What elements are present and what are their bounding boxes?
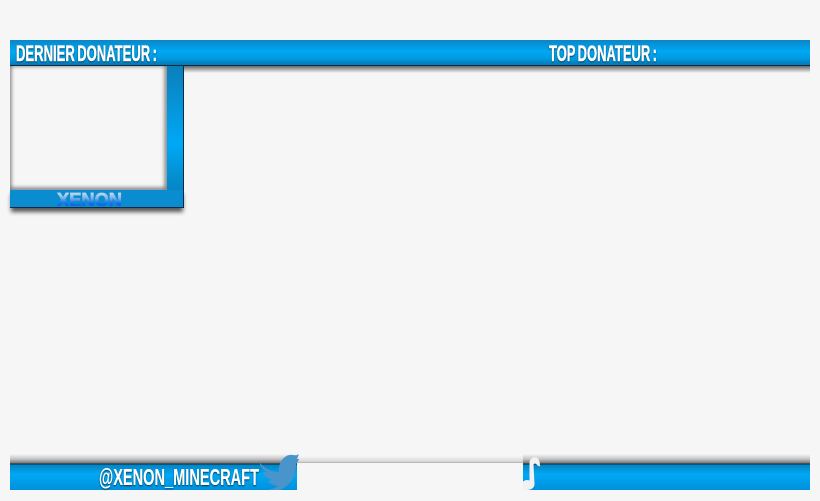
top bar dark edge (10, 65, 810, 66)
twitter handle: @XENON_MINECRAFT (99, 464, 259, 490)
webcam opening with inner shadow (9, 64, 167, 190)
bottom right edge (523, 464, 810, 465)
frame drop shadow (11, 194, 183, 212)
panel: top bar (10, 40, 810, 66)
icon: twitter bird (260, 454, 299, 490)
bottom left shadow (10, 454, 297, 464)
heading: last donor: DERNIER DONATEUR : (16, 41, 157, 66)
bottom left bar (10, 464, 297, 490)
bottom left edge (10, 464, 297, 465)
bottom middle line (297, 456, 523, 463)
heading: top donor: TOP DONATEUR : (549, 41, 657, 66)
frame bottom bar (10, 190, 183, 207)
top bar background (10, 40, 810, 65)
icon: music note (523, 457, 540, 490)
panel: bottom strip (10, 454, 810, 490)
frame right side (167, 66, 183, 207)
bottom right shadow (523, 454, 810, 464)
frame label: XENON (57, 190, 122, 210)
bottom right bar (523, 464, 810, 490)
top bar shadow (10, 66, 810, 73)
frame edge (10, 66, 184, 208)
panel: webcam frame (9, 64, 184, 212)
